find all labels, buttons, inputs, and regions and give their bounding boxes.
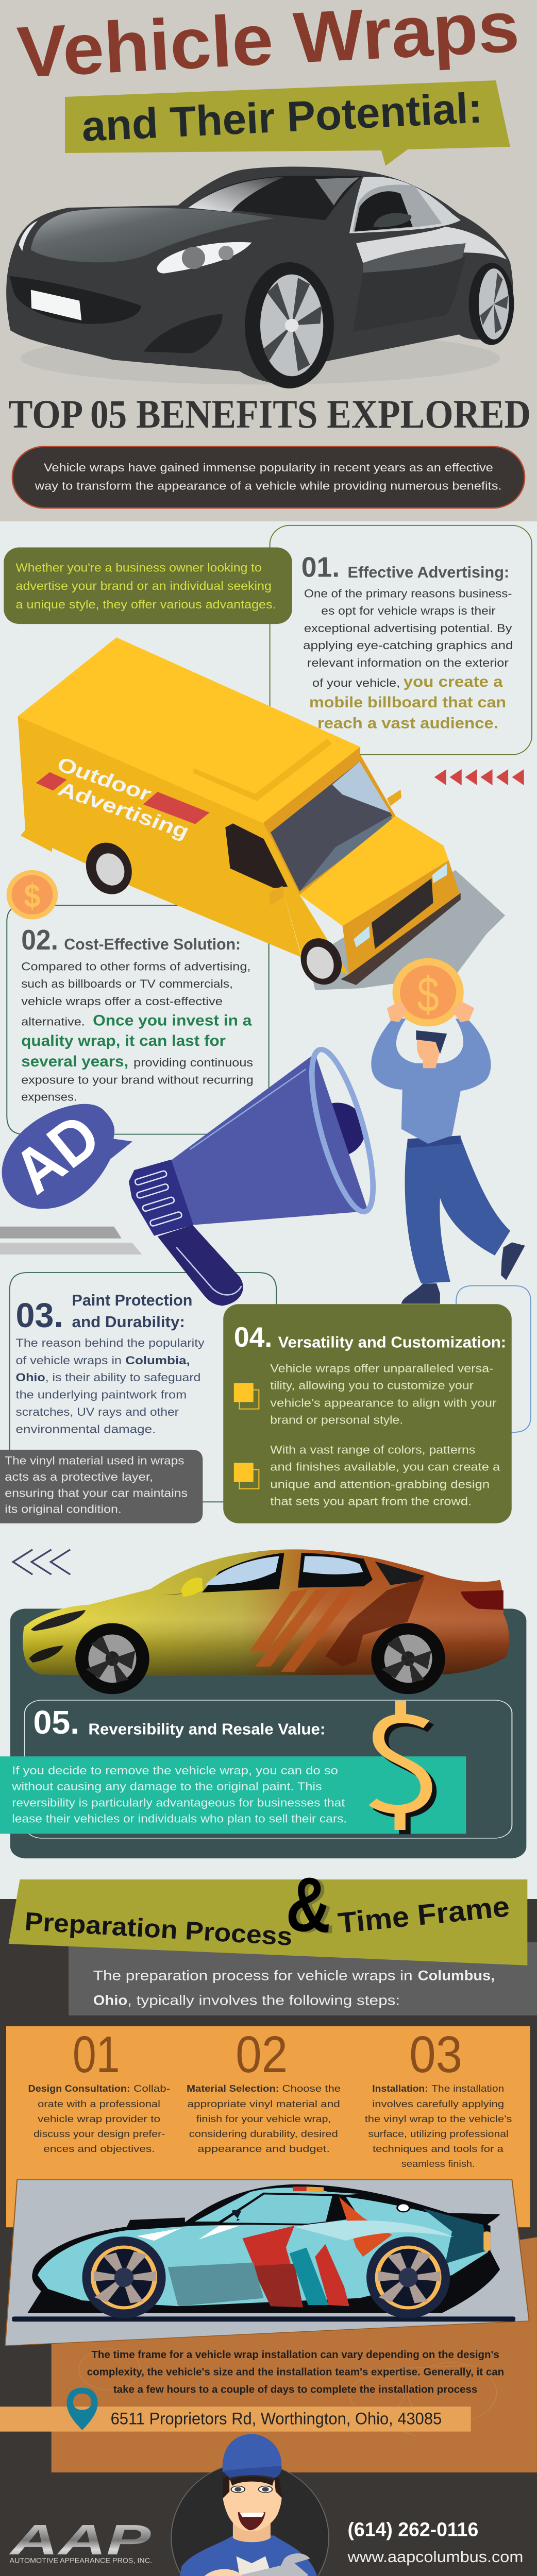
- step 03: techniques and tools for a: [373, 2144, 504, 2155]
- step 01: [28, 2025, 170, 2155]
- panel: 02 card lower: providing continuous: [133, 1056, 253, 1069]
- panel: 04 versatility and customization: Vehicle wraps offer unparalleled versa-: [270, 1362, 494, 1375]
- callout: vinyl material: its original condition.: [5, 1502, 122, 1515]
- step 02: [187, 2025, 341, 2155]
- panel: 01 effective advertising: exceptional advertising potential. By: [304, 621, 512, 635]
- step 01: Collab-: [133, 2083, 170, 2094]
- step 01: 01: [73, 2025, 120, 2083]
- step 03: involves carefully applying: [372, 2099, 504, 2110]
- section: benefits 02 lower, 03, 04: [0, 1001, 531, 1523]
- icon: large coin: $: [417, 967, 439, 1022]
- step 02: 02: [236, 2025, 288, 2083]
- step 01: Design Consultation:: [28, 2083, 130, 2094]
- panel: 03 paint protection frame: [10, 1273, 276, 1502]
- icon: AD speech bubble: AD: [0, 1100, 113, 1207]
- intro pill: way to transform the appearance of a vehicle while providing numerous benefits.: [35, 479, 501, 492]
- callout: whether you're a business owner: Whether you're a business owner looking to: [16, 561, 262, 574]
- icon: large coin: [393, 958, 464, 1026]
- panel: 03 paint protection frame: of vehicle wraps in: [16, 1353, 122, 1367]
- panel: 03 paint protection frame: Ohio: [16, 1371, 45, 1384]
- panel: 04 versatility and customization: tility, allowing you to customize your: [270, 1379, 474, 1392]
- section: steps: [5, 1968, 537, 2472]
- panel: 04 versatility and customization: Versatility and Customization:: [278, 1333, 506, 1351]
- panel: 02 card lower: several years,: [21, 1054, 128, 1070]
- icon: bullet one: [234, 1383, 259, 1409]
- panel: 01 effective advertising: Effective Advertising:: [347, 564, 509, 581]
- panel: 02 card frame and heading: [7, 905, 269, 1030]
- panel: 02 card frame and heading: Compared to other forms of advertising,: [21, 960, 250, 973]
- panel: 05 reversibility: Reversibility and Resale Value:: [88, 1720, 325, 1738]
- heading text: preparation process: &: [284, 1860, 334, 1949]
- heading banner: preparation process and time frame: [9, 1879, 527, 1965]
- icon: bullet two: [234, 1463, 259, 1489]
- illustration: person walking: [371, 1001, 525, 1304]
- panel: 04 versatility and customization: unique and attention-grabbing design: [270, 1478, 490, 1490]
- heading text: preparation process: Time Frame: [337, 1890, 511, 1939]
- step 01: orate with a professional: [38, 2099, 160, 2110]
- illustration: mechanic: [166, 2434, 329, 2576]
- panel: 04 versatility and customization: brand or personal style.: [270, 1413, 403, 1426]
- intro text: preparation process: The preparation process for vehicle wraps in: [93, 1968, 413, 1984]
- step 02: finish for your vehicle wrap,: [196, 2114, 331, 2125]
- step 03: [365, 2025, 512, 2170]
- icon: chevrons: [13, 1550, 70, 1574]
- panel: 01 effective advertising: [270, 526, 532, 755]
- panel: 03 paint protection frame: 03.: [16, 1297, 63, 1335]
- panel: 03 paint protection frame: Columbia,: [125, 1353, 190, 1367]
- panel: 03 paint protection frame: , is their ability to safeguard: [45, 1371, 200, 1384]
- panel: 05 reversibility: without causing any damage to the original paint. This: [11, 1780, 322, 1793]
- panel: 02 card lower: expenses.: [21, 1090, 77, 1103]
- illustration: wrapped sedan: [23, 1549, 509, 1694]
- panel: 02 card frame and heading: Once you invest in a: [93, 1012, 252, 1029]
- icon: dollar sign: [373, 1701, 431, 1834]
- step 02: Choose the: [282, 2083, 341, 2094]
- icon: location pin: [66, 2387, 98, 2430]
- intro text: preparation process: Columbus,: [418, 1968, 495, 1984]
- step 03: 03: [409, 2025, 462, 2083]
- panel: 02 card frame and heading: 02.: [21, 924, 58, 956]
- address bar: [0, 2406, 471, 2432]
- panel: 03 paint protection frame: The reason behind the popularity: [16, 1336, 205, 1349]
- panel: 05 reversibility: reversibility is particularly advantageous for businesses that: [12, 1796, 345, 1809]
- van lettering: Advertising: [56, 776, 190, 844]
- panel: 01 effective advertising: reach a vast audience.: [317, 715, 498, 732]
- section: benefits 01 and 02 upper: [4, 526, 532, 1030]
- panel: 02 card lower: quality wrap, it can last for: [21, 1033, 226, 1049]
- panel: 05 reversibility: 05.: [33, 1704, 79, 1741]
- step 01: ences and objectives.: [43, 2144, 155, 2155]
- panel: 04 versatility and customization: that sets you apart from the crowd.: [270, 1495, 472, 1508]
- hero section: [6, 0, 531, 508]
- illustration: dark sports car: [6, 166, 514, 388]
- panel: 01 effective advertising: 01.: [301, 551, 340, 583]
- panel: 01 effective advertising: es opt for vehicle wraps is their: [321, 604, 496, 617]
- illustration: megaphone: [129, 1044, 385, 1306]
- panel: 02 card frame and heading: vehicle wraps offer a cost-effective: [21, 994, 223, 1008]
- panel: 01 effective advertising: mobile billboard that can: [309, 694, 506, 711]
- step 03: seamless finish.: [401, 2159, 475, 2170]
- intro text: preparation process: Ohio: [93, 1993, 127, 2008]
- step 03: Installation:: [372, 2083, 428, 2094]
- panel: orange steps background: [6, 2026, 530, 2227]
- panel: gray car frame: [5, 2180, 529, 2346]
- section: footer: [0, 2349, 523, 2576]
- panel: 05 reversibility: lease their vehicles or individuals who plan to sell their cars.: [12, 1812, 347, 1825]
- heading text: preparation process: &: [288, 1861, 338, 1950]
- panel: 03 paint protection frame: scratches, UV rays and other: [16, 1405, 179, 1418]
- panel: 03 paint protection frame: the underlying paintwork from: [16, 1388, 187, 1401]
- step 02: Material Selection:: [187, 2083, 279, 2094]
- logo: AAP: AAP: [8, 2516, 152, 2564]
- heading text: preparation process: Preparation Process: [24, 1907, 293, 1951]
- callout: whether you're a business owner: [4, 548, 292, 624]
- callout: vinyl material: ensuring that your car maintains: [5, 1486, 188, 1500]
- step 01: vehicle wrap provider to: [38, 2114, 160, 2125]
- step 02: appearance and budget.: [197, 2144, 330, 2155]
- panel: 02 card frame and heading: Cost-Effective Solution:: [64, 936, 241, 953]
- panel: 04 versatility and customization: and finishes available, you can create a: [270, 1460, 500, 1473]
- step 02: considering durability, desired: [189, 2129, 338, 2140]
- panel: 01 effective advertising: One of the primary reasons business-: [304, 587, 512, 600]
- panel: 01 effective advertising: you create a: [404, 673, 503, 690]
- panel: 03 paint protection frame: and Durability:: [72, 1313, 185, 1331]
- callout: vinyl material: The vinyl material used in wraps: [5, 1454, 184, 1467]
- panel: 04 versatility and customization: vehicle's appearance to align with your: [270, 1396, 497, 1409]
- intro text: preparation process: [93, 1968, 495, 2008]
- callout: vinyl material: acts as a protective layer,: [5, 1470, 153, 1483]
- arrows: red triangles: [434, 769, 524, 785]
- panel: 04 versatility and customization: [223, 1304, 512, 1523]
- panel: 02 card frame and heading: such as billboards or TV commercials,: [21, 977, 233, 990]
- panel: 04 versatility and customization: With a vast range of colors, patterns: [270, 1443, 475, 1456]
- panel: 05 reversibility: If you decide to remove the vehicle wrap, you can do so: [12, 1764, 338, 1777]
- blue frame behind panel 04: [456, 1286, 531, 1432]
- panel: dark orange time frame background: [52, 2237, 537, 2472]
- decorative bars: [0, 1227, 142, 1255]
- banner: and Their Potential: and Their Potential:: [80, 83, 483, 150]
- panel: 01 effective advertising: relevant information on the exterior: [307, 656, 509, 669]
- panel: 01 effective advertising: applying eye-catching graphics and: [303, 639, 513, 652]
- van lettering: Outdoor: [56, 752, 154, 807]
- illustration: teal wrapped sports car: [12, 2184, 515, 2321]
- callout: whether you're a business owner: advertise your brand or an individual seeking: [16, 579, 272, 592]
- intro pill: [12, 447, 525, 508]
- panel: 02 card lower: [7, 1030, 269, 1134]
- panel: 02 card frame and heading: alternative.: [21, 1015, 85, 1028]
- panel: 03 paint protection frame: environmental damage.: [16, 1422, 156, 1435]
- logo: AAP: AUTOMOTIVE APPEARANCE PROS, INC.: [10, 2556, 152, 2564]
- callout: vinyl material: [0, 1450, 203, 1523]
- panel: 01 effective advertising: of your vehicle,: [312, 676, 400, 689]
- van lettering: [56, 752, 190, 844]
- heading text: preparation process: [24, 1860, 511, 1951]
- panel: 03 paint protection frame: Paint Protection: [72, 1291, 192, 1309]
- icon: small coin: [7, 870, 58, 919]
- step 03: The installation: [431, 2083, 504, 2094]
- callout: whether you're a business owner: a unique style, they offer various advantages.: [16, 598, 276, 611]
- icon: small coin: $: [24, 877, 40, 914]
- section: benefit 05: [0, 1549, 527, 1965]
- illustration: yellow van: [18, 637, 505, 990]
- panel: 02 card lower: exposure to your brand without recurring: [21, 1073, 254, 1086]
- text block: time frame: [87, 2349, 504, 2395]
- panel: 04 versatility and customization: 04.: [234, 1321, 272, 1353]
- step 02: appropriate vinyl material and: [187, 2099, 340, 2110]
- intro text: preparation process: , typically involves the following steps:: [127, 1993, 400, 2008]
- intro pill: Vehicle wraps have gained immense popularity in recent years as an effective: [44, 461, 493, 474]
- panel: 05 reversibility: [0, 1608, 526, 1858]
- step 01: discuss your design prefer-: [33, 2129, 165, 2140]
